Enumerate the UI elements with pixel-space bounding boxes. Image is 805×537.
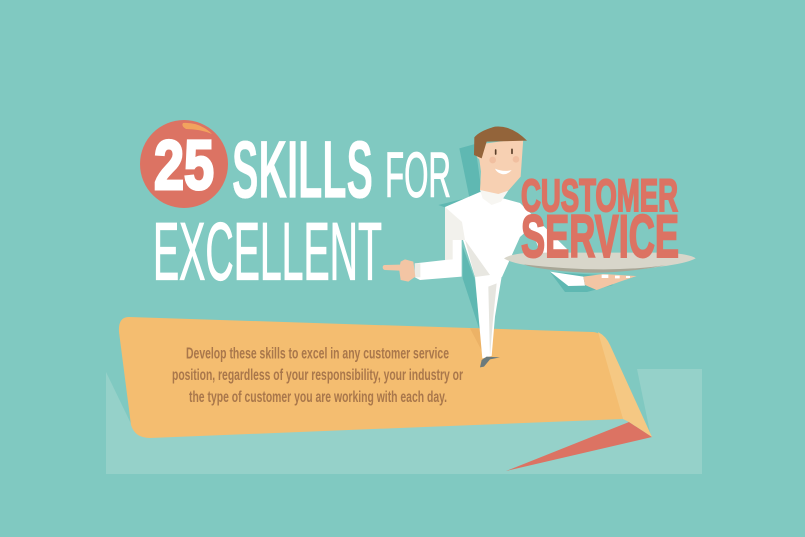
tray and hand (504, 253, 696, 290)
trousers (475, 277, 502, 367)
ribbon text: the type of customer you are working with each day. (189, 389, 447, 406)
ribbon text (172, 346, 463, 406)
title: EXCELLENT (153, 206, 382, 298)
title: SKILLS (232, 124, 373, 216)
cuff (415, 263, 420, 277)
light backdrop band (106, 369, 702, 474)
tray (504, 253, 696, 271)
ribbon shadow of legs (470, 328, 484, 355)
smile (495, 169, 512, 174)
pointing hand (383, 259, 415, 282)
holding hand (583, 274, 637, 290)
ribbon banner (119, 317, 652, 471)
shirt shading (465, 240, 490, 277)
waiter illustration (383, 127, 696, 367)
ribbon text: Develop these skills to excel in any customer service (186, 346, 449, 362)
customer service lettering: SERVICE (521, 203, 679, 270)
ribbon main (119, 317, 623, 438)
fingernails (602, 275, 630, 278)
cuff (550, 272, 585, 286)
face (475, 138, 523, 195)
shoe (480, 357, 500, 367)
figure shadow (438, 144, 613, 328)
cheeks (489, 157, 496, 163)
ribbon fold (598, 332, 652, 437)
shirt torso and sleeve (445, 192, 568, 277)
upper arm fold (445, 207, 465, 240)
customer service lettering: CUSTOMER (521, 170, 678, 221)
badge: 25: 25 (154, 126, 214, 204)
ribbon tail (506, 422, 652, 471)
head (474, 127, 527, 205)
ribbon text: position, regardless of your responsibility, your industry or (172, 367, 463, 384)
hair (474, 127, 527, 158)
eyes (496, 149, 512, 154)
collar (480, 190, 508, 205)
text: FOR (385, 139, 451, 211)
pointing arm (383, 240, 462, 282)
title (153, 124, 451, 298)
customer service lettering (521, 170, 679, 270)
